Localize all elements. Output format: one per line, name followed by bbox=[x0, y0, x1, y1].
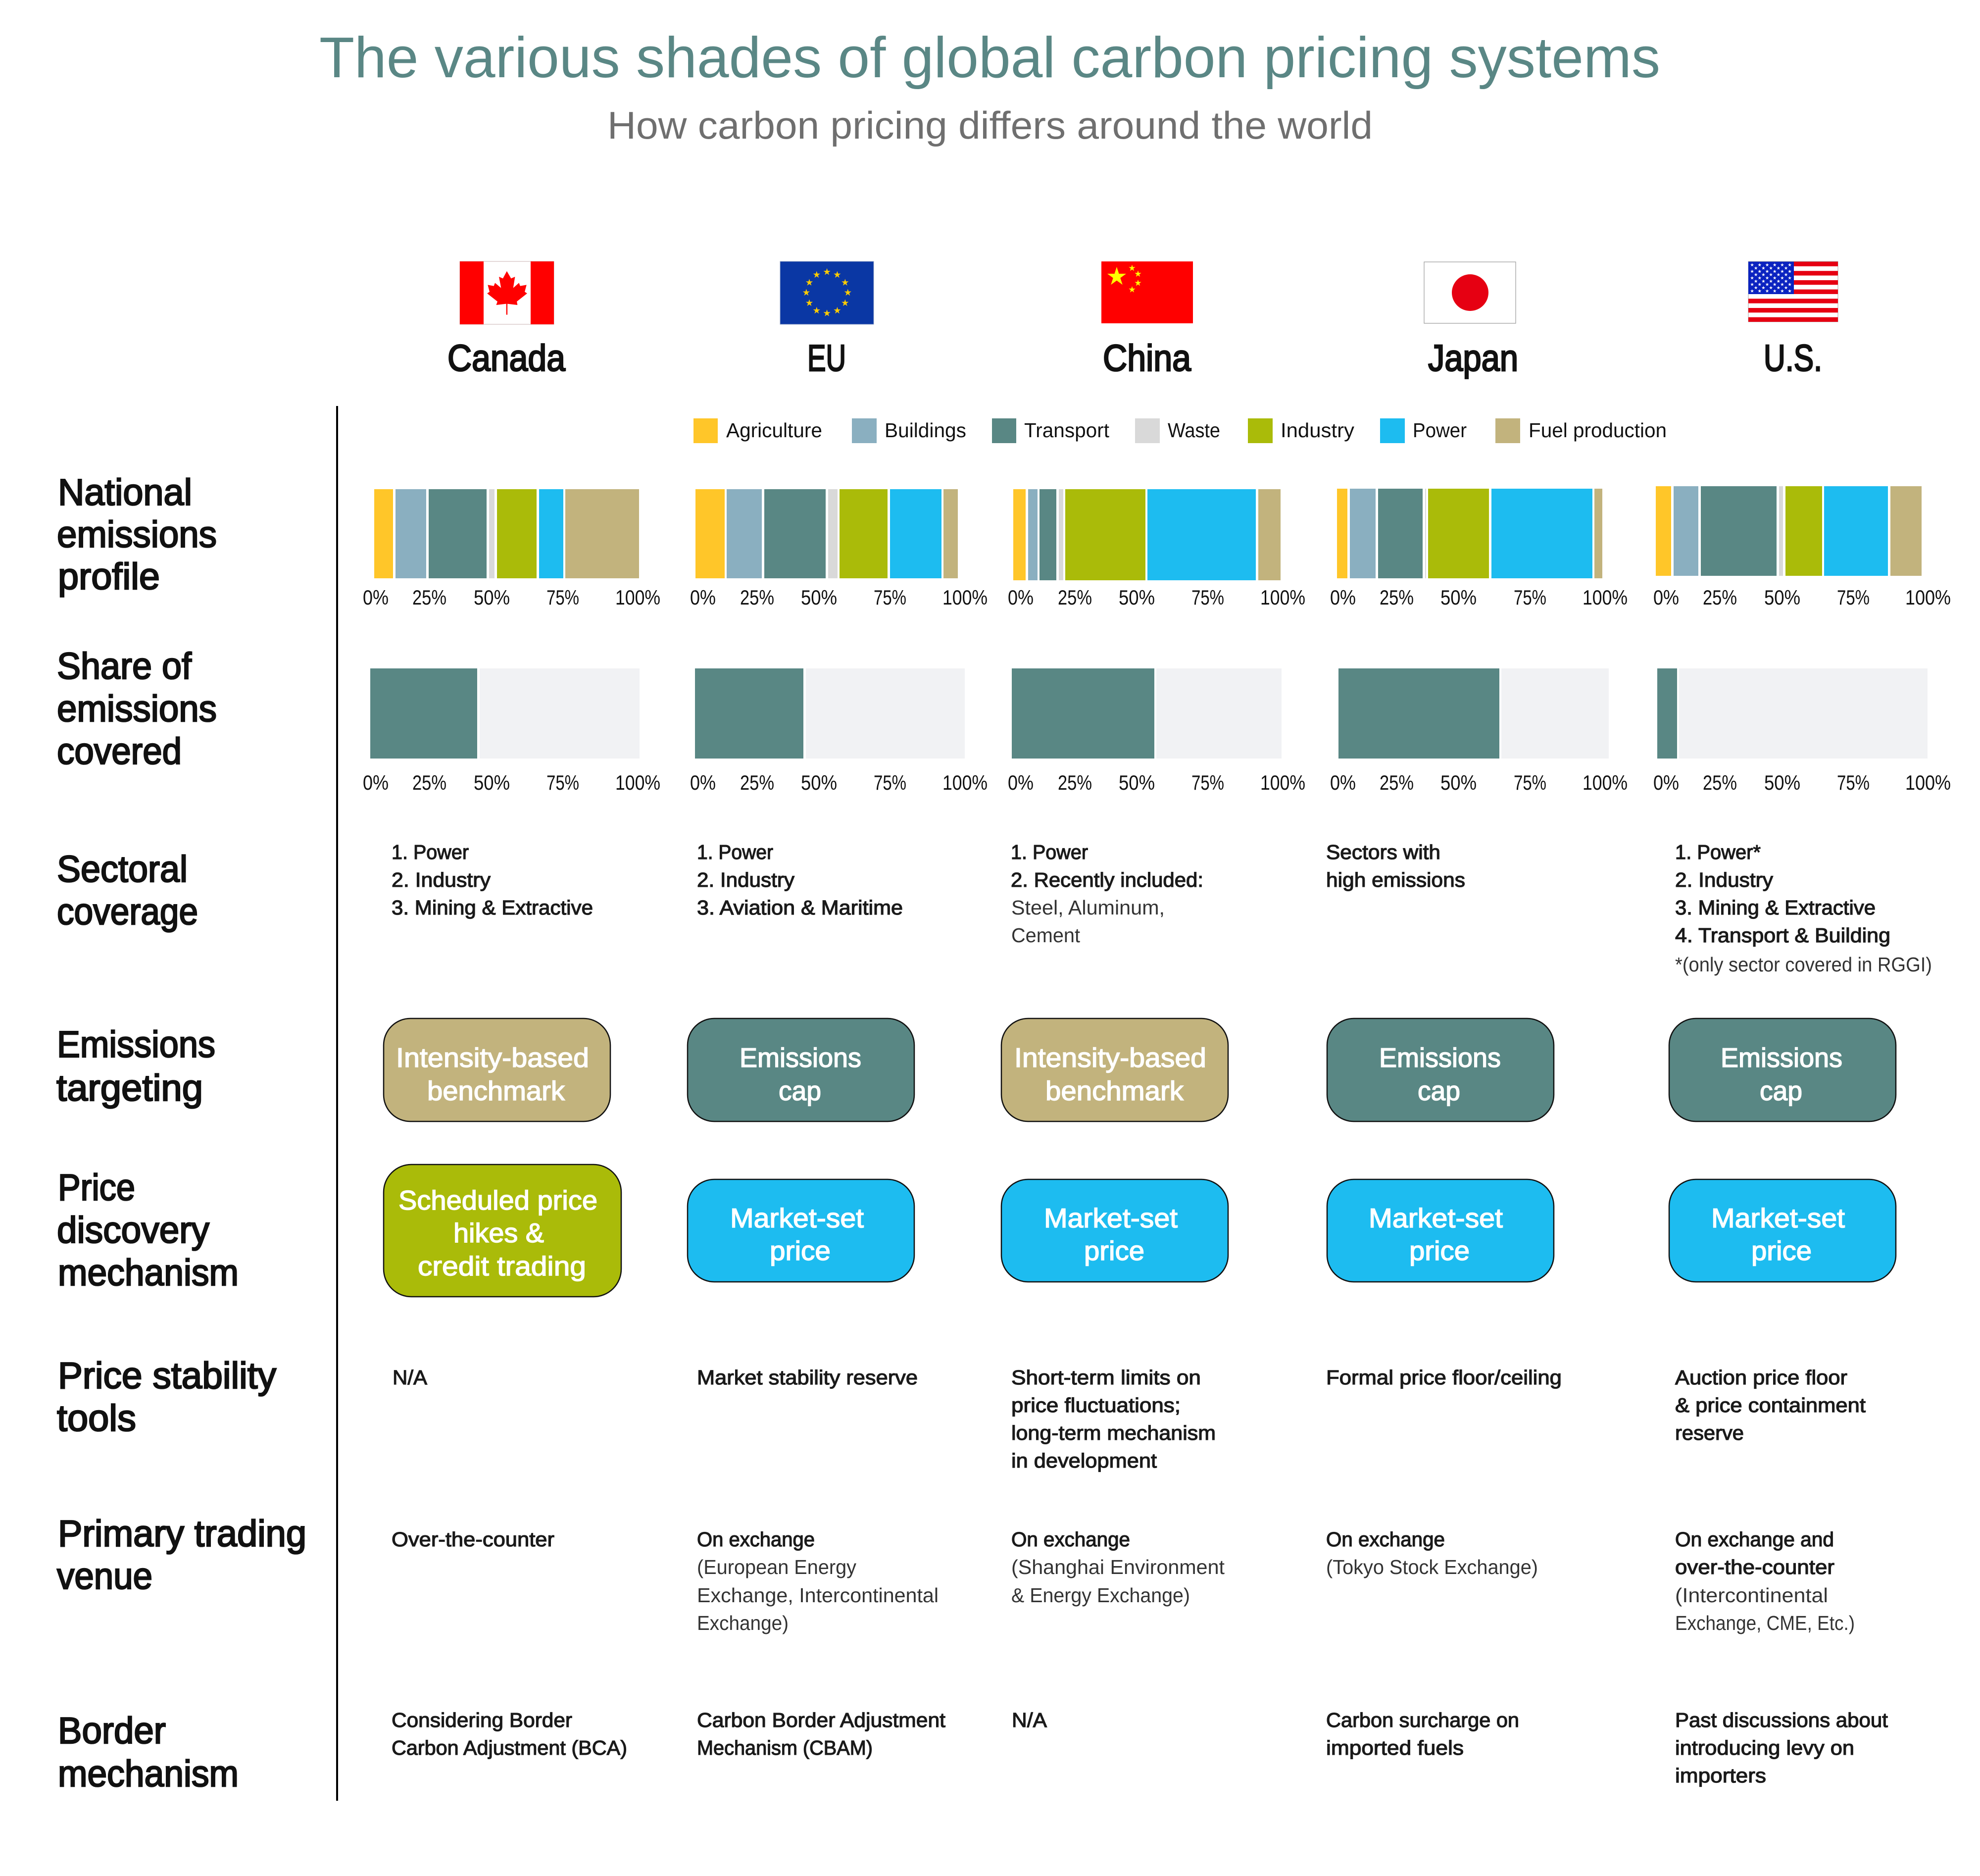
sectoral coverage text: 3. Mining & Extractive bbox=[392, 896, 593, 919]
price discovery box: price bbox=[1084, 1235, 1144, 1266]
emissions targeting box: Emissions bbox=[740, 1042, 861, 1073]
border mechanism text: Carbon surcharge on bbox=[1326, 1709, 1519, 1731]
column: Canada bbox=[363, 261, 660, 1759]
trading venue text: On exchange bbox=[1326, 1528, 1445, 1551]
axis: share covered: 50% bbox=[801, 771, 837, 794]
price discovery box: Market-set bbox=[1369, 1203, 1503, 1233]
price stability text: & price containment bbox=[1675, 1394, 1866, 1417]
trading venue text: Over-the-counter bbox=[392, 1528, 554, 1551]
row label: emissions targeting: targeting bbox=[56, 1067, 203, 1109]
axis: emissions profile: 25% bbox=[412, 586, 446, 609]
emissions targeting box: benchmark bbox=[1045, 1075, 1184, 1106]
vertical divider bbox=[336, 406, 338, 1801]
row label: price discovery mechanism bbox=[57, 1166, 239, 1293]
trading venue text: & Energy Exchange) bbox=[1011, 1584, 1190, 1607]
stacked bar: national emissions bbox=[1337, 489, 1602, 578]
emissions targeting box: cap bbox=[1418, 1075, 1460, 1106]
row label: price stability tools bbox=[57, 1355, 276, 1439]
icon: Japan flag bbox=[1424, 262, 1516, 323]
row label: border mechanism: Border bbox=[58, 1710, 166, 1751]
axis: emissions profile bbox=[690, 586, 988, 609]
bar: share covered bbox=[1657, 668, 1928, 759]
border mechanism text: N/A bbox=[1012, 1709, 1047, 1731]
axis: emissions profile: 75% bbox=[1191, 586, 1224, 609]
trading venue text: over-the-counter bbox=[1675, 1556, 1834, 1578]
axis: share covered: 75% bbox=[1514, 771, 1546, 794]
legend: power: Power bbox=[1413, 419, 1467, 442]
axis: emissions profile: 25% bbox=[1380, 586, 1414, 609]
axis: share covered: 25% bbox=[740, 771, 774, 794]
border mechanism text: Carbon Border Adjustment bbox=[697, 1709, 946, 1731]
axis: emissions profile: 0% bbox=[1330, 586, 1356, 609]
emissions targeting box bbox=[1669, 1018, 1896, 1121]
country name: U.S. bbox=[1764, 337, 1822, 379]
axis: share covered: 75% bbox=[1837, 771, 1870, 794]
price discovery box bbox=[1327, 1179, 1554, 1282]
legend: waste bbox=[1135, 418, 1220, 443]
sectoral coverage text: 1. Power bbox=[1011, 841, 1088, 863]
border mechanism text: Carbon Adjustment (BCA) bbox=[392, 1736, 627, 1759]
bar: share covered bbox=[1012, 668, 1282, 759]
price discovery box: credit trading bbox=[418, 1251, 586, 1281]
sectoral coverage text: 1. Power* bbox=[1675, 841, 1761, 863]
emissions targeting box: benchmark bbox=[427, 1075, 565, 1106]
row label: share of emissions covered: Share of bbox=[57, 645, 192, 687]
price discovery box bbox=[384, 1165, 621, 1297]
sectoral coverage text: 1. Power bbox=[392, 841, 469, 863]
axis: share covered: 25% bbox=[1380, 771, 1414, 794]
sectoral coverage text: Sectors with bbox=[1326, 841, 1440, 863]
trading venue text: On exchange bbox=[1011, 1528, 1130, 1551]
axis: share covered bbox=[1653, 771, 1951, 794]
row label: price stability tools: Price stability bbox=[58, 1355, 276, 1396]
stacked bar: national emissions bbox=[695, 489, 958, 578]
row labels bbox=[56, 471, 306, 1794]
axis: share covered: 0% bbox=[363, 771, 389, 794]
emissions targeting box: Emissions bbox=[1721, 1042, 1842, 1073]
row label: emissions targeting: Emissions bbox=[57, 1023, 215, 1065]
price stability text bbox=[1011, 1366, 1216, 1472]
border mechanism text: imported fuels bbox=[1326, 1736, 1464, 1759]
row label: price discovery mechanism: Price bbox=[58, 1166, 135, 1208]
row label: share of emissions covered bbox=[57, 645, 217, 772]
axis: emissions profile: 100% bbox=[1260, 586, 1305, 609]
row label: national emissions profile: emissions bbox=[57, 513, 217, 555]
axis: share covered bbox=[1008, 771, 1305, 794]
price discovery box bbox=[1669, 1179, 1896, 1282]
icon: Canada flag bbox=[460, 261, 554, 324]
subtitle: How carbon pricing differs around the world bbox=[607, 103, 1373, 147]
trading venue text: On exchange bbox=[697, 1528, 815, 1551]
price stability text: Market stability reserve bbox=[697, 1366, 918, 1389]
legend: buildings bbox=[852, 418, 966, 443]
legend: buildings: Buildings bbox=[885, 419, 966, 442]
sectoral coverage text: Steel, Aluminum, bbox=[1011, 896, 1165, 919]
border mechanism text: importers bbox=[1675, 1764, 1766, 1787]
price stability text: Formal price floor/ceiling bbox=[1326, 1366, 1562, 1389]
price stability text: long-term mechanism bbox=[1011, 1421, 1216, 1444]
icon: China flag bbox=[1101, 261, 1193, 323]
border mechanism text: Considering Border bbox=[392, 1709, 572, 1731]
row label: national emissions profile: National bbox=[58, 471, 192, 513]
legend: industry bbox=[1248, 418, 1355, 443]
axis: emissions profile: 100% bbox=[942, 586, 988, 609]
sectoral coverage text: 2. Industry bbox=[697, 868, 795, 891]
axis: emissions profile: 75% bbox=[546, 586, 579, 609]
axis: share covered: 50% bbox=[1119, 771, 1155, 794]
legend: agriculture bbox=[693, 418, 822, 443]
price discovery box: Market-set bbox=[1044, 1203, 1178, 1233]
axis: emissions profile: 75% bbox=[874, 586, 906, 609]
emissions targeting box bbox=[384, 1018, 610, 1121]
row label: sectoral coverage bbox=[57, 848, 198, 932]
sectoral coverage text bbox=[697, 841, 903, 919]
icon: U.S. flag bbox=[1748, 261, 1838, 322]
price stability text: in development bbox=[1011, 1449, 1157, 1472]
row label: share of emissions covered: emissions bbox=[57, 688, 217, 729]
border mechanism text: Mechanism (CBAM) bbox=[697, 1736, 873, 1759]
trading venue text: (Tokyo Stock Exchange) bbox=[1326, 1556, 1538, 1578]
row label: price stability tools: tools bbox=[57, 1397, 136, 1439]
sectoral coverage text: 3. Mining & Extractive bbox=[1675, 896, 1876, 919]
emissions targeting box: Intensity-based bbox=[396, 1042, 589, 1073]
axis: share covered bbox=[690, 771, 988, 794]
border mechanism text: introducing levy on bbox=[1675, 1736, 1854, 1759]
axis: emissions profile: 75% bbox=[1837, 586, 1870, 609]
axis: emissions profile bbox=[1653, 586, 1951, 609]
icon: EU flag bbox=[780, 261, 874, 324]
border mechanism text: Past discussions about bbox=[1675, 1709, 1888, 1731]
price discovery box: Market-set bbox=[1711, 1203, 1845, 1233]
axis: share covered: 0% bbox=[1008, 771, 1034, 794]
sectoral coverage text bbox=[1011, 841, 1203, 947]
axis: emissions profile: 50% bbox=[801, 586, 837, 609]
axis: share covered: 75% bbox=[546, 771, 579, 794]
emissions targeting box bbox=[688, 1018, 914, 1121]
axis: emissions profile bbox=[363, 586, 660, 609]
legend: transport bbox=[992, 418, 1110, 443]
column: China bbox=[1001, 261, 1305, 1731]
price stability text: reserve bbox=[1675, 1421, 1744, 1444]
axis: share covered: 100% bbox=[615, 771, 660, 794]
country name: Japan bbox=[1428, 337, 1518, 379]
bar: share covered bbox=[1338, 668, 1609, 759]
trading venue text: (European Energy bbox=[697, 1556, 856, 1578]
axis: share covered: 50% bbox=[474, 771, 510, 794]
trading venue text: (Shanghai Environment bbox=[1011, 1556, 1225, 1578]
axis: share covered: 50% bbox=[1764, 771, 1800, 794]
row label: border mechanism: mechanism bbox=[58, 1753, 239, 1794]
axis: emissions profile bbox=[1330, 586, 1628, 609]
legend: power bbox=[1380, 418, 1467, 443]
axis: share covered bbox=[363, 771, 660, 794]
trading venue text: Exchange, Intercontinental bbox=[697, 1584, 939, 1607]
border mechanism text bbox=[1326, 1709, 1519, 1759]
trading venue text: (Intercontinental bbox=[1675, 1584, 1828, 1607]
row label: national emissions profile: profile bbox=[58, 556, 160, 597]
price stability text: N/A bbox=[393, 1366, 428, 1389]
row label: primary trading venue bbox=[57, 1513, 306, 1597]
price stability text bbox=[1675, 1366, 1866, 1444]
price discovery box: price bbox=[770, 1235, 831, 1266]
axis: emissions profile: 0% bbox=[1008, 586, 1034, 609]
axis: share covered: 100% bbox=[942, 771, 988, 794]
axis: emissions profile: 50% bbox=[474, 586, 510, 609]
price stability text: price fluctuations; bbox=[1011, 1394, 1181, 1417]
stacked bar: national emissions bbox=[1656, 486, 1922, 576]
axis: emissions profile: 100% bbox=[1583, 586, 1628, 609]
emissions targeting box: cap bbox=[1760, 1075, 1802, 1106]
row label: national emissions profile bbox=[57, 471, 217, 597]
legend: waste: Waste bbox=[1168, 419, 1220, 442]
sectoral coverage text: *(only sector covered in RGGI) bbox=[1675, 953, 1932, 976]
axis: share covered: 50% bbox=[1440, 771, 1477, 794]
row label: emissions targeting bbox=[56, 1023, 215, 1109]
axis: emissions profile: 50% bbox=[1764, 586, 1800, 609]
sectoral coverage text bbox=[1326, 841, 1465, 891]
border mechanism text bbox=[697, 1709, 946, 1759]
row label: price discovery mechanism: mechanism bbox=[58, 1252, 239, 1293]
axis: share covered: 0% bbox=[1330, 771, 1356, 794]
emissions targeting box: Intensity-based bbox=[1014, 1042, 1206, 1073]
column: EU bbox=[688, 261, 988, 1759]
bar: share covered bbox=[695, 668, 965, 759]
trading venue text: On exchange and bbox=[1675, 1528, 1834, 1551]
axis: share covered: 0% bbox=[690, 771, 716, 794]
row label: border mechanism bbox=[58, 1710, 239, 1794]
title: The various shades of global carbon pricing systems bbox=[319, 25, 1660, 90]
price discovery box: price bbox=[1751, 1235, 1812, 1266]
stacked bar: national emissions bbox=[1013, 489, 1281, 580]
row label: primary trading venue: venue bbox=[57, 1555, 152, 1597]
trading venue text: Exchange, CME, Etc.) bbox=[1675, 1612, 1855, 1634]
emissions targeting box: cap bbox=[779, 1075, 821, 1106]
axis: emissions profile: 25% bbox=[1058, 586, 1092, 609]
row label: sectoral coverage: Sectoral bbox=[57, 848, 188, 890]
price discovery box bbox=[1001, 1179, 1228, 1282]
country name: Canada bbox=[447, 337, 565, 379]
trading venue text: Exchange) bbox=[697, 1612, 789, 1634]
price discovery box: Scheduled price bbox=[398, 1185, 597, 1216]
axis: share covered bbox=[1330, 771, 1628, 794]
axis: share covered: 100% bbox=[1260, 771, 1305, 794]
emissions targeting box bbox=[1001, 1018, 1228, 1121]
axis: emissions profile: 25% bbox=[740, 586, 774, 609]
row label: sectoral coverage: coverage bbox=[57, 891, 198, 932]
emissions targeting box bbox=[1327, 1018, 1554, 1121]
price discovery box: price bbox=[1409, 1235, 1470, 1266]
legend: industry: Industry bbox=[1281, 419, 1355, 442]
sectoral coverage text bbox=[1675, 841, 1932, 976]
price stability text: Short-term limits on bbox=[1011, 1366, 1201, 1389]
axis: share covered: 100% bbox=[1583, 771, 1628, 794]
legend: agriculture: Agriculture bbox=[726, 419, 822, 442]
axis: share covered: 25% bbox=[1058, 771, 1092, 794]
axis: emissions profile: 0% bbox=[1653, 586, 1679, 609]
legend: transport: Transport bbox=[1024, 419, 1110, 442]
price discovery box: Market-set bbox=[730, 1203, 864, 1233]
trading venue text bbox=[697, 1528, 939, 1634]
axis: share covered: 0% bbox=[1653, 771, 1679, 794]
border mechanism text bbox=[1675, 1709, 1888, 1787]
sectoral coverage text: high emissions bbox=[1326, 868, 1465, 891]
bar: share covered bbox=[370, 668, 640, 759]
stacked bar: national emissions bbox=[374, 489, 639, 578]
column: Japan bbox=[1326, 262, 1628, 1759]
trading venue text bbox=[1675, 1528, 1855, 1634]
sectoral coverage text: 1. Power bbox=[697, 841, 773, 863]
sectoral coverage text: 4. Transport & Building bbox=[1675, 924, 1890, 947]
country name: EU bbox=[807, 337, 846, 379]
sectoral coverage text bbox=[392, 841, 593, 919]
trading venue text bbox=[1326, 1528, 1538, 1578]
axis: emissions profile: 25% bbox=[1703, 586, 1737, 609]
axis: share covered: 75% bbox=[1191, 771, 1224, 794]
trading venue text bbox=[1011, 1528, 1225, 1607]
row label: share of emissions covered: covered bbox=[57, 730, 182, 772]
axis: emissions profile: 50% bbox=[1119, 586, 1155, 609]
legend bbox=[693, 418, 1667, 443]
axis: emissions profile: 100% bbox=[615, 586, 660, 609]
axis: emissions profile: 0% bbox=[363, 586, 389, 609]
price stability text: Auction price floor bbox=[1675, 1366, 1847, 1389]
sectoral coverage text: Cement bbox=[1011, 924, 1081, 947]
legend: fuel production: Fuel production bbox=[1529, 419, 1667, 442]
sectoral coverage text: 2. Industry bbox=[1675, 868, 1774, 891]
axis: share covered: 25% bbox=[412, 771, 446, 794]
axis: share covered: 25% bbox=[1703, 771, 1737, 794]
price discovery box bbox=[688, 1179, 914, 1282]
row label: primary trading venue: Primary trading bbox=[58, 1513, 306, 1554]
sectoral coverage text: 2. Industry bbox=[392, 868, 491, 891]
column: U.S. bbox=[1653, 261, 1951, 1787]
axis: emissions profile: 0% bbox=[690, 586, 716, 609]
country name: China bbox=[1103, 337, 1191, 379]
axis: emissions profile: 75% bbox=[1514, 586, 1546, 609]
emissions targeting box: Emissions bbox=[1379, 1042, 1501, 1073]
axis: emissions profile: 50% bbox=[1440, 586, 1477, 609]
price discovery box: hikes & bbox=[453, 1217, 544, 1248]
sectoral coverage text: 3. Aviation & Maritime bbox=[697, 896, 903, 919]
border mechanism text bbox=[392, 1709, 627, 1759]
sectoral coverage text: 2. Recently included: bbox=[1011, 868, 1203, 891]
axis: emissions profile bbox=[1008, 586, 1305, 609]
axis: emissions profile: 100% bbox=[1905, 586, 1951, 609]
axis: share covered: 100% bbox=[1905, 771, 1951, 794]
axis: share covered: 75% bbox=[874, 771, 906, 794]
row label: price discovery mechanism: discovery bbox=[57, 1209, 209, 1251]
